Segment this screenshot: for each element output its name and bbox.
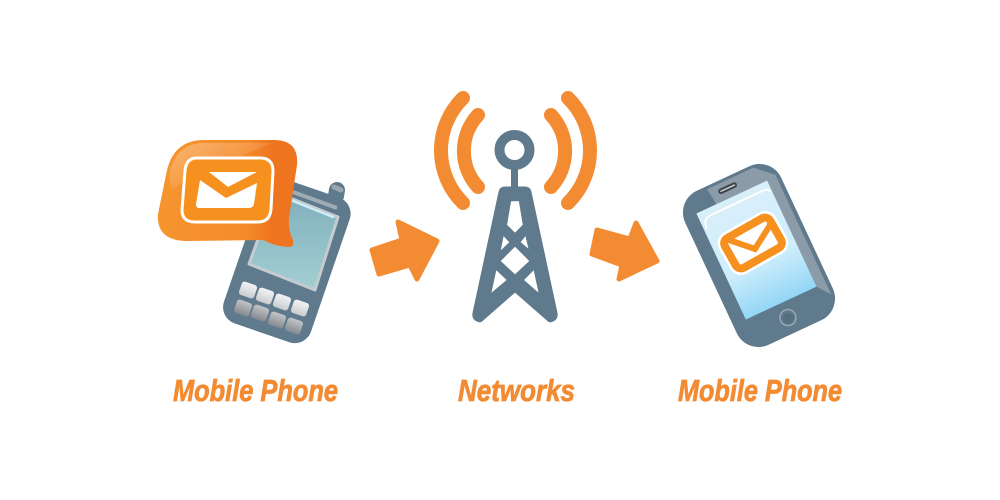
signal waves left — [441, 98, 478, 203]
icon: sending mobile phone with message bubble — [158, 140, 355, 348]
tower — [473, 135, 557, 322]
label: networks: Networks — [458, 373, 575, 408]
speaker — [717, 181, 738, 195]
envelope icon in bubble — [182, 158, 273, 222]
keypad — [233, 281, 310, 335]
message bubble — [158, 140, 297, 247]
phone body — [218, 173, 355, 348]
arrow: network to phone — [592, 223, 657, 279]
phone body — [675, 156, 843, 355]
label: right phone: Mobile Phone — [678, 373, 842, 408]
icon: receiving smartphone — [682, 164, 836, 347]
signal waves right — [551, 98, 590, 203]
screen — [696, 181, 817, 320]
home button — [777, 307, 799, 328]
top and right bevel — [707, 168, 832, 294]
phone top bevel — [293, 192, 337, 208]
screen highlight — [293, 201, 333, 217]
envelope icon on screen — [717, 210, 789, 276]
label: left phone: Mobile Phone — [173, 373, 338, 408]
arrow: phone to network — [372, 222, 437, 279]
phone antenna — [334, 187, 341, 196]
icon: network tower with signal waves — [441, 98, 590, 322]
phone screen — [249, 192, 338, 290]
screen highlight — [702, 188, 773, 229]
